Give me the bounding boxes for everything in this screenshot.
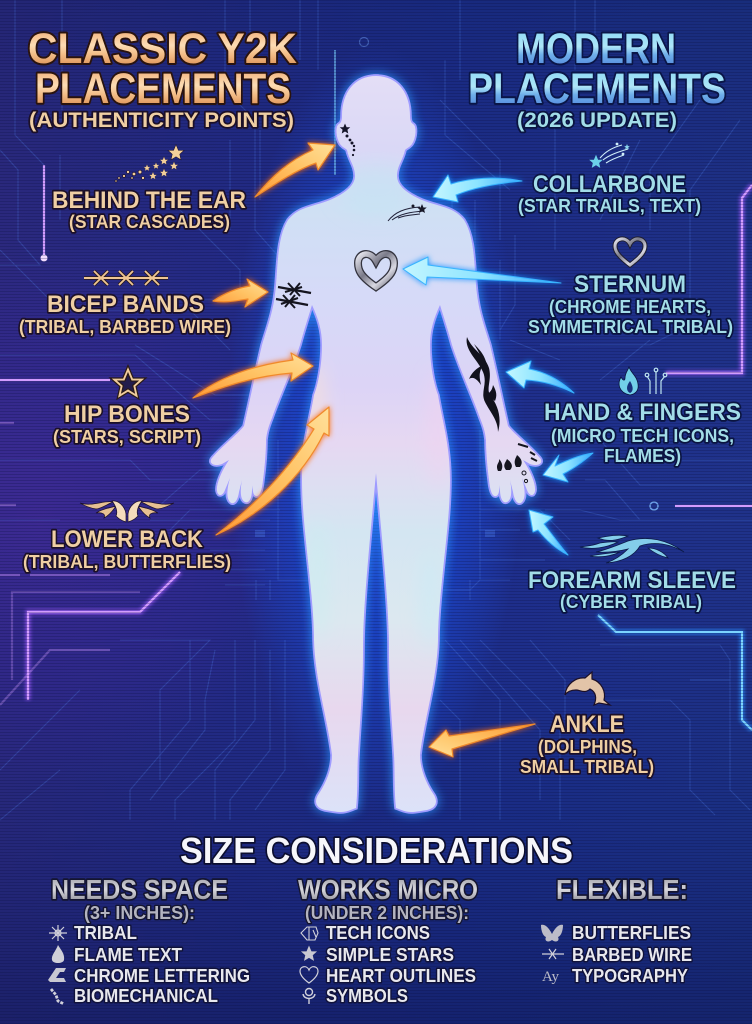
- heading: classic Y2K placements: (AUTHENTICITY POINTS): [29, 109, 294, 132]
- label: forearm sleeve: (CYBER TRIBAL): [560, 592, 702, 612]
- label: collarbone: (STAR TRAILS, TEXT): [518, 196, 701, 216]
- column: flexible: FLEXIBLE:: [556, 874, 688, 905]
- label: sternum: STERNUM: [574, 271, 686, 298]
- label: ankle: [520, 711, 654, 777]
- icon: barbed wire: [542, 949, 564, 959]
- tattoo: hand flames and tech icons: [497, 444, 537, 483]
- label: sternum: [528, 271, 733, 337]
- icon: cyber tribal: [580, 535, 684, 563]
- heading: modern placements: (2026 UPDATE): [517, 109, 677, 132]
- arrow: ankle: [429, 724, 535, 757]
- label: lower back: LOWER BACK: [51, 526, 204, 553]
- heading: classic Y2K placements: CLASSIC Y2K: [28, 25, 297, 73]
- label: behind the ear: (STAR CASCADES): [69, 212, 230, 232]
- label: collarbone: [518, 171, 701, 216]
- label: hand and fingers: HAND & FINGERS: [544, 399, 741, 426]
- label: behind the ear: [52, 187, 246, 232]
- tattoo: chrome heart on sternum: [358, 254, 394, 287]
- column: works micro: SIMPLE STARS: [326, 945, 454, 965]
- column: flexible: [541, 874, 692, 986]
- label: ankle: (DOLPHINS,: [538, 737, 637, 757]
- tattoo: star cascade behind ear: [340, 124, 355, 156]
- column: needs space: BIOMECHANICAL: [74, 986, 218, 1006]
- column: flexible: TYPOGRAPHY: [572, 966, 688, 986]
- column: needs space: CHROME LETTERING: [74, 966, 250, 986]
- label: ankle: ANKLE: [550, 711, 624, 738]
- arrow: fingers lower: [543, 453, 593, 482]
- label: lower back: [23, 526, 231, 572]
- label: sternum: (CHROME HEARTS,: [549, 297, 711, 317]
- column: needs space: [48, 874, 250, 1006]
- icon: tech: [301, 927, 318, 940]
- label: behind the ear: BEHIND THE EAR: [52, 187, 246, 214]
- icon: tribal butterfly: [80, 501, 174, 522]
- arrow: behind the ear: [255, 143, 335, 197]
- arrow: forearm sleeve: [529, 510, 568, 555]
- icon: chrome C: [48, 968, 66, 982]
- label: hip bones: (STARS, SCRIPT): [53, 427, 201, 447]
- column: works micro: WORKS MICRO: [298, 874, 478, 905]
- arrow: collarbone: [433, 175, 522, 202]
- column: needs space: TRIBAL: [74, 923, 137, 943]
- icon: star cascade: [115, 144, 184, 182]
- label: hand and fingers: FLAMES): [604, 446, 681, 466]
- icon: star outline: [114, 370, 142, 396]
- column: works micro: HEART OUTLINES: [326, 966, 476, 986]
- label: forearm sleeve: [528, 567, 736, 612]
- arrow: lower back: [216, 407, 329, 535]
- icon: barbed wire: [84, 271, 168, 285]
- label: hand and fingers: (MICRO TECH ICONS,: [551, 426, 734, 446]
- label: bicep bands: BICEP BANDS: [47, 291, 204, 318]
- icon: butterfly: [541, 925, 563, 941]
- arrow: hip bones: [193, 353, 313, 398]
- tattoo: forearm tribal: [467, 337, 500, 432]
- icon: star: [301, 946, 317, 961]
- icon: typography: Ay: [542, 969, 559, 985]
- icon: dolphin: [565, 672, 610, 705]
- column: works micro: (UNDER 2 INCHES):: [305, 903, 469, 923]
- column: flexible: BUTTERFLIES: [572, 923, 691, 943]
- arrow: sternum: [403, 257, 561, 285]
- icon: chrome heart outline: [615, 239, 645, 265]
- heading: classic Y2K placements: [28, 25, 297, 132]
- label: sternum: SYMMETRICAL TRIBAL): [528, 317, 733, 337]
- icon: flame and tech: [619, 367, 667, 395]
- label: hand and fingers: [544, 399, 741, 466]
- column: needs space: NEEDS SPACE: [51, 874, 228, 905]
- arrow: bicep: [213, 279, 268, 307]
- label: collarbone: COLLARBONE: [533, 171, 686, 198]
- heading: classic Y2K placements: PLACEMENTS: [35, 65, 291, 113]
- column: works micro: TECH ICONS: [326, 923, 430, 943]
- label: hip bones: HIP BONES: [64, 401, 190, 428]
- icon: tribal: [49, 925, 67, 941]
- arrow: hand and fingers: [506, 361, 574, 393]
- column: needs space: FLAME TEXT: [74, 945, 182, 965]
- tattoo: collarbone star trail: [388, 204, 427, 221]
- label: lower back: (TRIBAL, BUTTERFLIES): [23, 552, 231, 572]
- icon: shooting star: [589, 143, 630, 168]
- column: works micro: [298, 874, 478, 1006]
- tattoo: barbed wire bicep band: [276, 283, 311, 308]
- label: bicep bands: [19, 291, 231, 337]
- heading: modern placements: [468, 25, 726, 132]
- label: hip bones: [53, 401, 201, 447]
- icon: symbol: [303, 988, 315, 1004]
- label: ankle: SMALL TRIBAL): [520, 757, 654, 777]
- column: needs space: (3+ INCHES):: [84, 903, 195, 923]
- human body silhouette: [211, 76, 541, 812]
- icon: biomechanical: [51, 989, 64, 1004]
- column: works micro: SYMBOLS: [326, 986, 408, 1006]
- heading: modern placements: MODERN: [516, 25, 676, 73]
- label: bicep bands: (TRIBAL, BARBED WIRE): [19, 317, 231, 337]
- label: forearm sleeve: FOREARM SLEEVE: [528, 567, 736, 594]
- icon: flame: [52, 945, 64, 963]
- heading: size considerations: SIZE CONSIDERATIONS: [180, 830, 573, 871]
- icon: heart: [300, 967, 318, 983]
- column: flexible: BARBED WIRE: [572, 945, 692, 965]
